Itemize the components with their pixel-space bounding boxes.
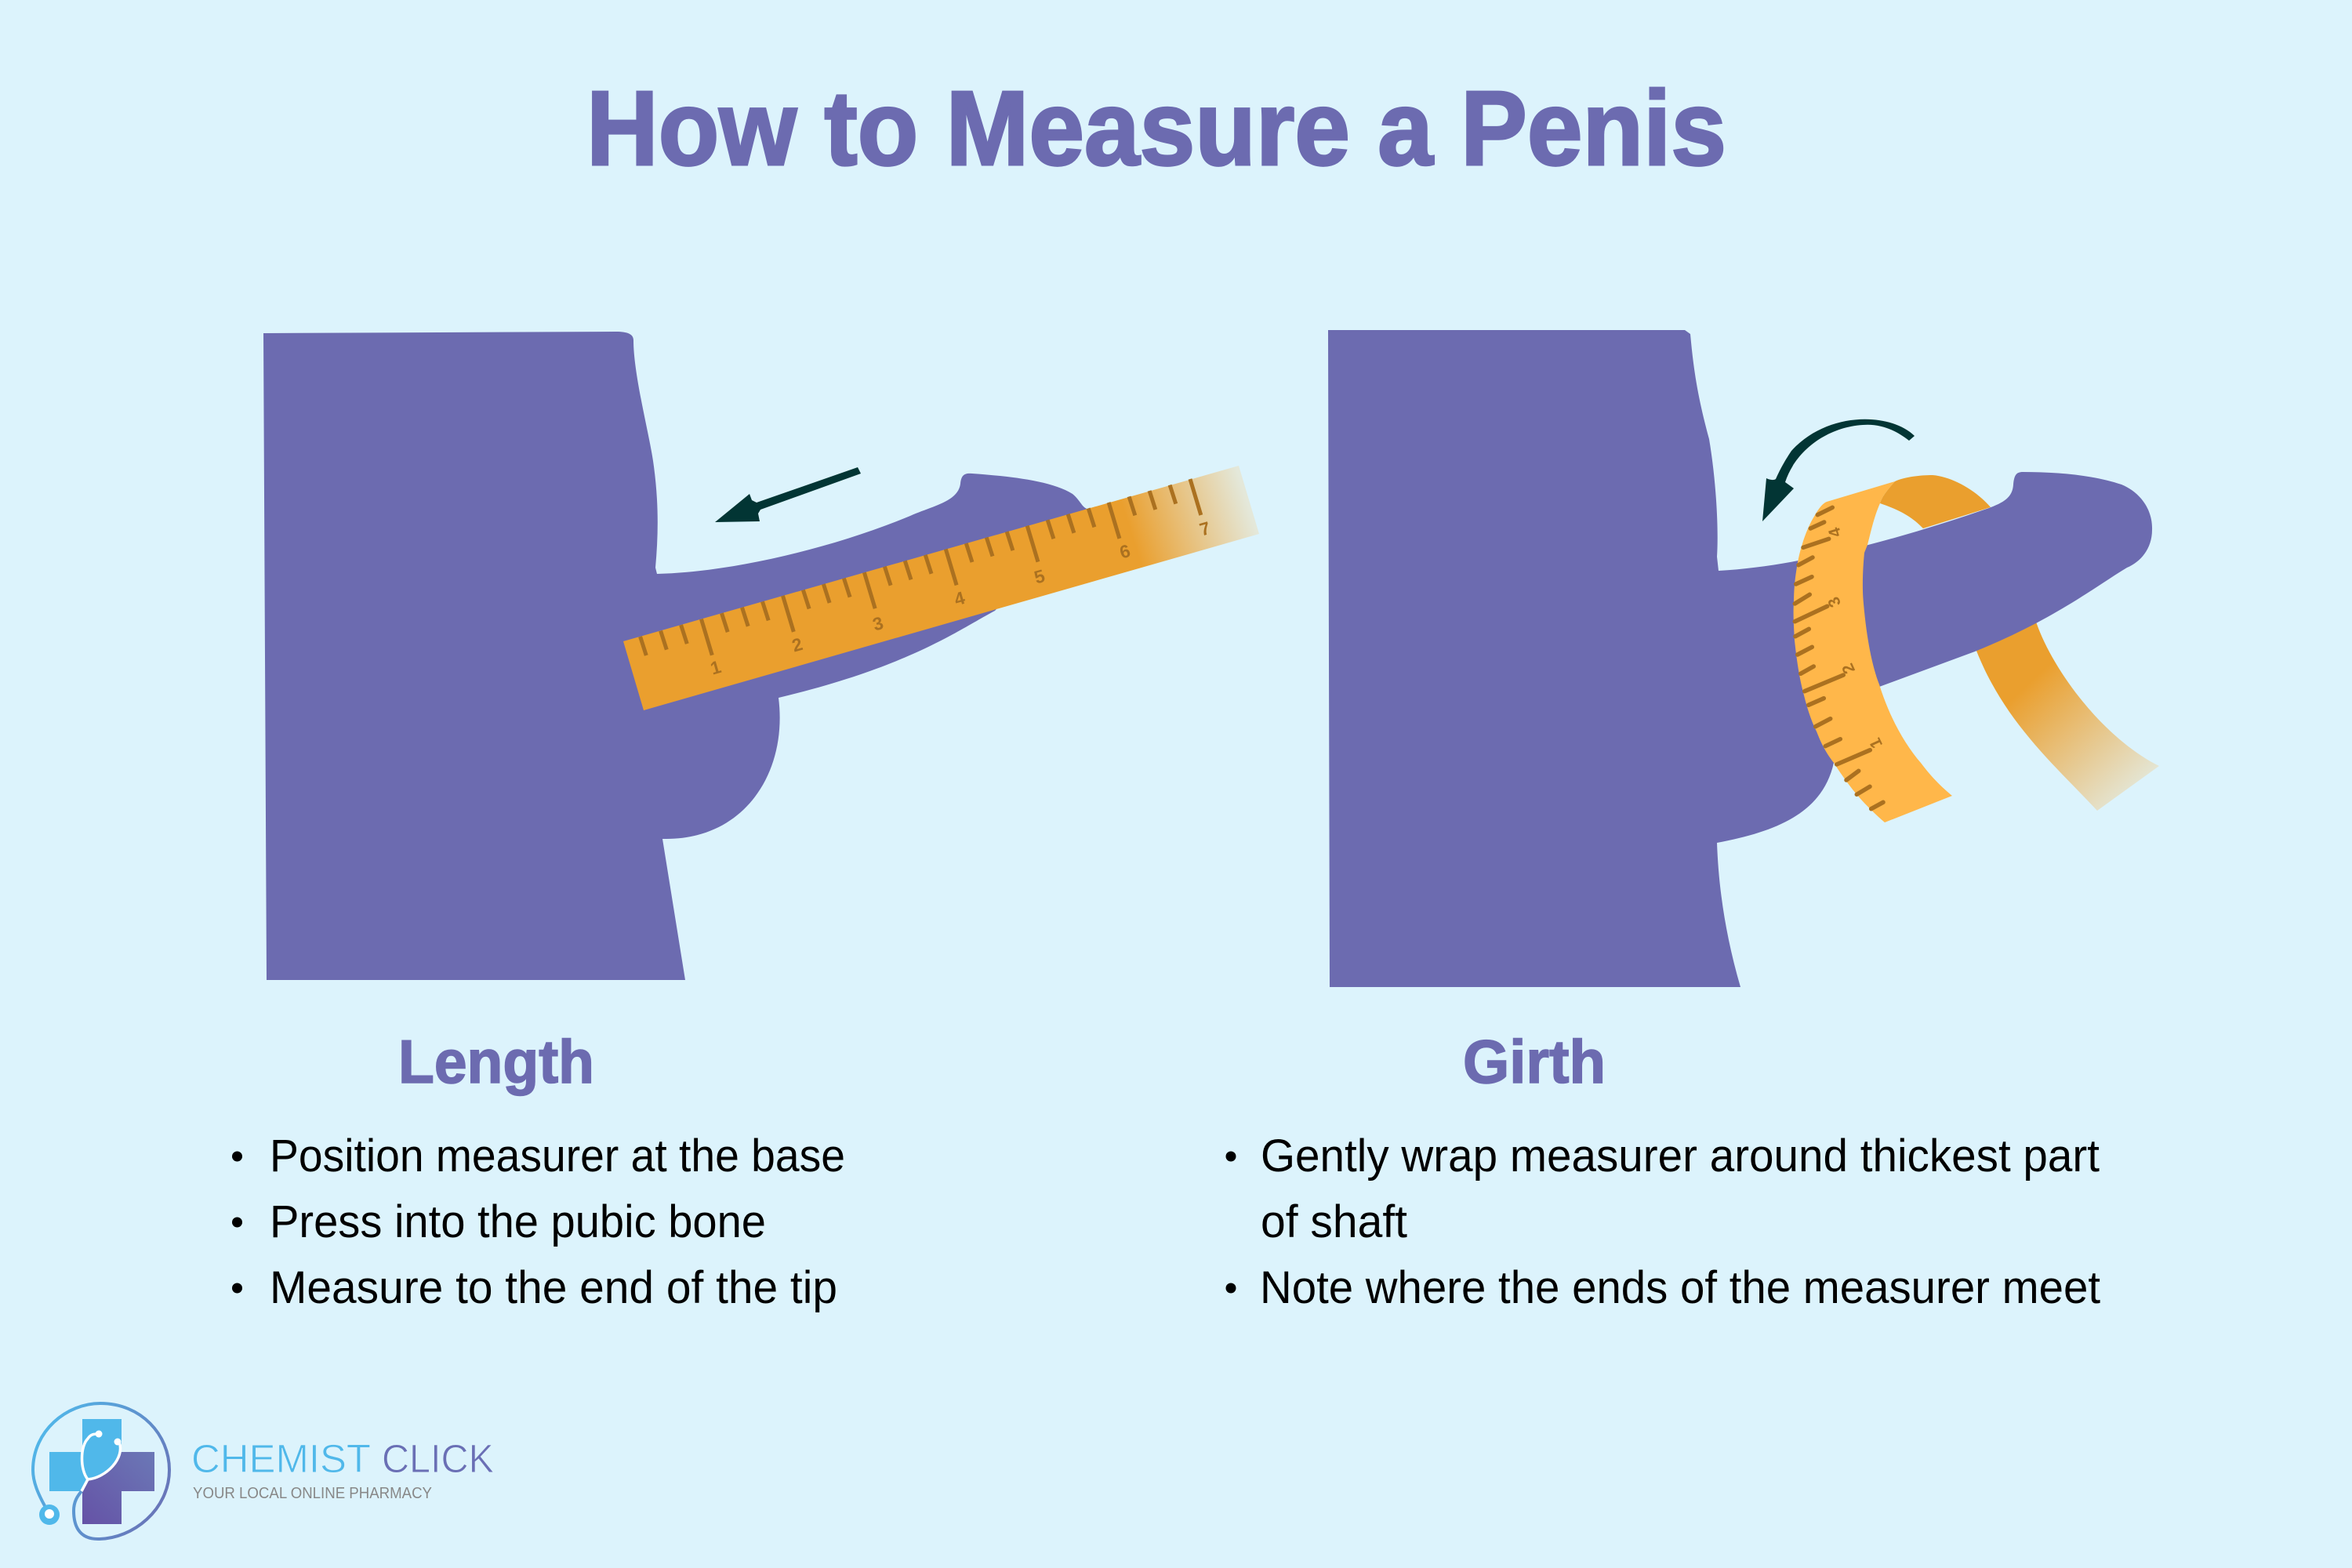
text block: girth instructions: Gently wrap measurer around thickest part [1261,1131,2100,1181]
body silhouette: length [263,332,1091,980]
text block: length instructions: Position measurer at the base [270,1131,845,1181]
tape measure: front band: 4 [1825,525,1845,539]
logo: Chemist Click [33,1403,494,1539]
text block: length instructions: Press into the pubic bone [270,1196,766,1247]
icon: medical cross with stethoscope [33,1403,169,1539]
arrow: wrap around [1762,419,1915,521]
ruler [623,466,1259,710]
tape measure: front band: 2 [1838,661,1859,677]
ruler: 2 [789,633,805,656]
panel: length diagram [263,332,1259,980]
tape measure: back loop [1880,475,2159,811]
ruler: 1 [708,656,724,679]
tape measure: front band: 1 [1866,735,1886,751]
body silhouette: girth [1328,330,2152,987]
ruler: 3 [870,612,886,635]
heading: Length: Length [398,1027,594,1096]
logo wordmark: CHEMIST [191,1436,371,1481]
title: How to Measure a Penis [586,69,1726,187]
text block: length instructions [232,1131,845,1313]
tape measure: front band [1794,481,1952,822]
arrow: push ruler toward base [715,467,861,522]
logo: Chemist Click: CLICK [382,1436,494,1481]
ruler: 7 [1197,517,1213,540]
text block: girth instructions: of shaft [1261,1196,1407,1247]
panel: girth diagram [1328,330,2159,987]
logo tagline: YOUR LOCAL ONLINE PHARMACY [193,1485,432,1502]
tape measure: front band: 3 [1824,594,1845,610]
text block: length instructions: Measure to the end of the tip [270,1262,837,1313]
text block: girth instructions: Note where the ends of the measurer meet [1260,1262,2100,1313]
text block: girth instructions [1226,1131,2100,1313]
ruler: 5 [1032,565,1047,588]
heading: Girth: Girth [1463,1027,1606,1096]
ruler: 4 [952,587,967,610]
ruler: 6 [1117,540,1133,563]
